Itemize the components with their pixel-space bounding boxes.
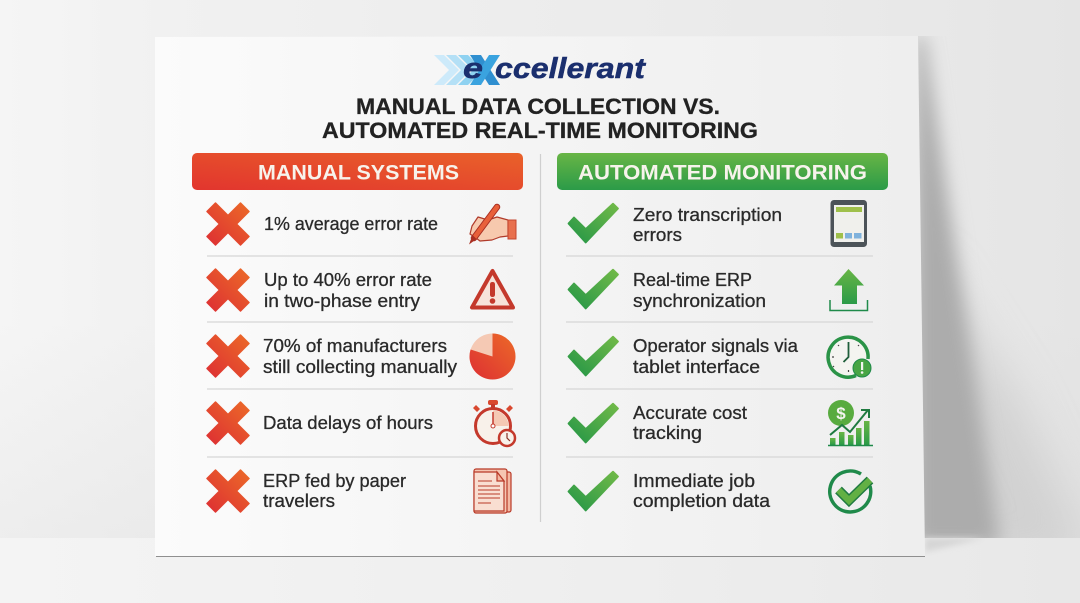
icon: dollar growth chart: $ — [836, 404, 846, 423]
row: 70% of manufacturers — [207, 334, 516, 380]
row: operator signals via tablet interface — [568, 335, 871, 377]
title: AUTOMATED REAL-TIME MONITORING — [322, 118, 758, 143]
title — [322, 94, 758, 143]
icon: red cross — [207, 269, 249, 311]
icon: dollar growth chart — [828, 400, 873, 446]
icon: clock with alert — [828, 337, 871, 377]
icon: stopwatch — [473, 400, 515, 446]
icon: pie chart — [470, 334, 516, 380]
text: erp fed by paper travelers: travelers — [263, 490, 335, 511]
icon: paper documents — [474, 469, 511, 513]
icon: green check — [568, 404, 618, 442]
logo: excellerant: e — [463, 53, 483, 85]
text: up to 40% error rate — [264, 269, 432, 311]
icon: red cross — [207, 470, 249, 512]
board shadow on floor — [925, 538, 985, 552]
text: data delays of hours: Data delays of hours — [263, 412, 433, 433]
icon: green check — [568, 270, 618, 308]
icon: hand writing with pen — [469, 207, 516, 244]
floor — [0, 538, 1080, 603]
icon: red cross — [207, 335, 249, 377]
text: 1% average error rate: 1% average error rate — [264, 213, 438, 234]
logo: excellerant: ccellerant — [495, 53, 646, 85]
row: immediate job completion data — [568, 470, 871, 512]
heading: manual systems: MANUAL SYSTEMS — [258, 162, 459, 184]
icon: tablet — [830, 200, 867, 247]
logo: excellerant — [434, 53, 646, 85]
icon: circled check — [830, 471, 871, 512]
row: accurate cost tracking — [568, 400, 873, 446]
text: immediate job completion data: Immediate job — [633, 470, 755, 491]
text: real-time erp synchronization — [633, 269, 766, 311]
panel: poster board — [155, 36, 925, 556]
row: zero transcription errors — [568, 200, 867, 247]
text: immediate job completion data: completion data — [633, 490, 771, 511]
heading: automated monitoring: AUTOMATED MONITORING — [578, 162, 867, 184]
icon: green check — [568, 472, 618, 510]
text: zero transcription errors — [633, 204, 782, 245]
text: real-time erp synchronization: synchronization — [633, 290, 766, 311]
row: up to 40% error rate — [207, 269, 513, 311]
text: accurate cost tracking: tracking — [633, 422, 702, 443]
row: 1% average error rate — [207, 203, 516, 245]
text: accurate cost tracking: Accurate cost — [633, 402, 747, 423]
icon: green check — [568, 204, 618, 242]
heading: manual systems — [192, 153, 523, 190]
text: zero transcription errors: errors — [633, 224, 682, 245]
icon: red cross — [207, 402, 249, 444]
text: 70% of manufacturers: 70% of manufacturers — [263, 335, 447, 356]
text: erp fed by paper travelers — [263, 470, 406, 511]
text: zero transcription errors: Zero transcription — [633, 204, 782, 225]
text: up to 40% error rate: in two-phase entry — [264, 290, 421, 311]
row: real-time erp synchronization — [568, 269, 868, 311]
board shadow on wall — [915, 36, 1080, 560]
row: erp fed by paper travelers — [207, 469, 511, 513]
icon: upload arrow — [830, 269, 868, 310]
title: MANUAL DATA COLLECTION VS. — [356, 94, 720, 119]
icon: warning triangle — [472, 271, 513, 308]
text: up to 40% error rate: Up to 40% error rate — [264, 269, 432, 290]
text: operator signals via tablet interface — [633, 335, 799, 377]
row: data delays of hours — [207, 400, 515, 446]
text: real-time erp synchronization: Real-time ERP — [633, 269, 752, 290]
text: immediate job completion data — [633, 470, 771, 511]
text: 70% of manufacturers: still collecting manually — [263, 356, 458, 377]
text: operator signals via tablet interface: tablet interface — [633, 356, 760, 377]
text: erp fed by paper travelers: ERP fed by paper — [263, 470, 406, 491]
text: 70% of manufacturers — [263, 335, 458, 377]
text: operator signals via tablet interface: Operator signals via — [633, 335, 799, 356]
heading: automated monitoring — [557, 153, 888, 190]
icon: red cross — [207, 203, 249, 245]
icon: green check — [568, 337, 618, 376]
text: accurate cost tracking — [633, 402, 747, 443]
